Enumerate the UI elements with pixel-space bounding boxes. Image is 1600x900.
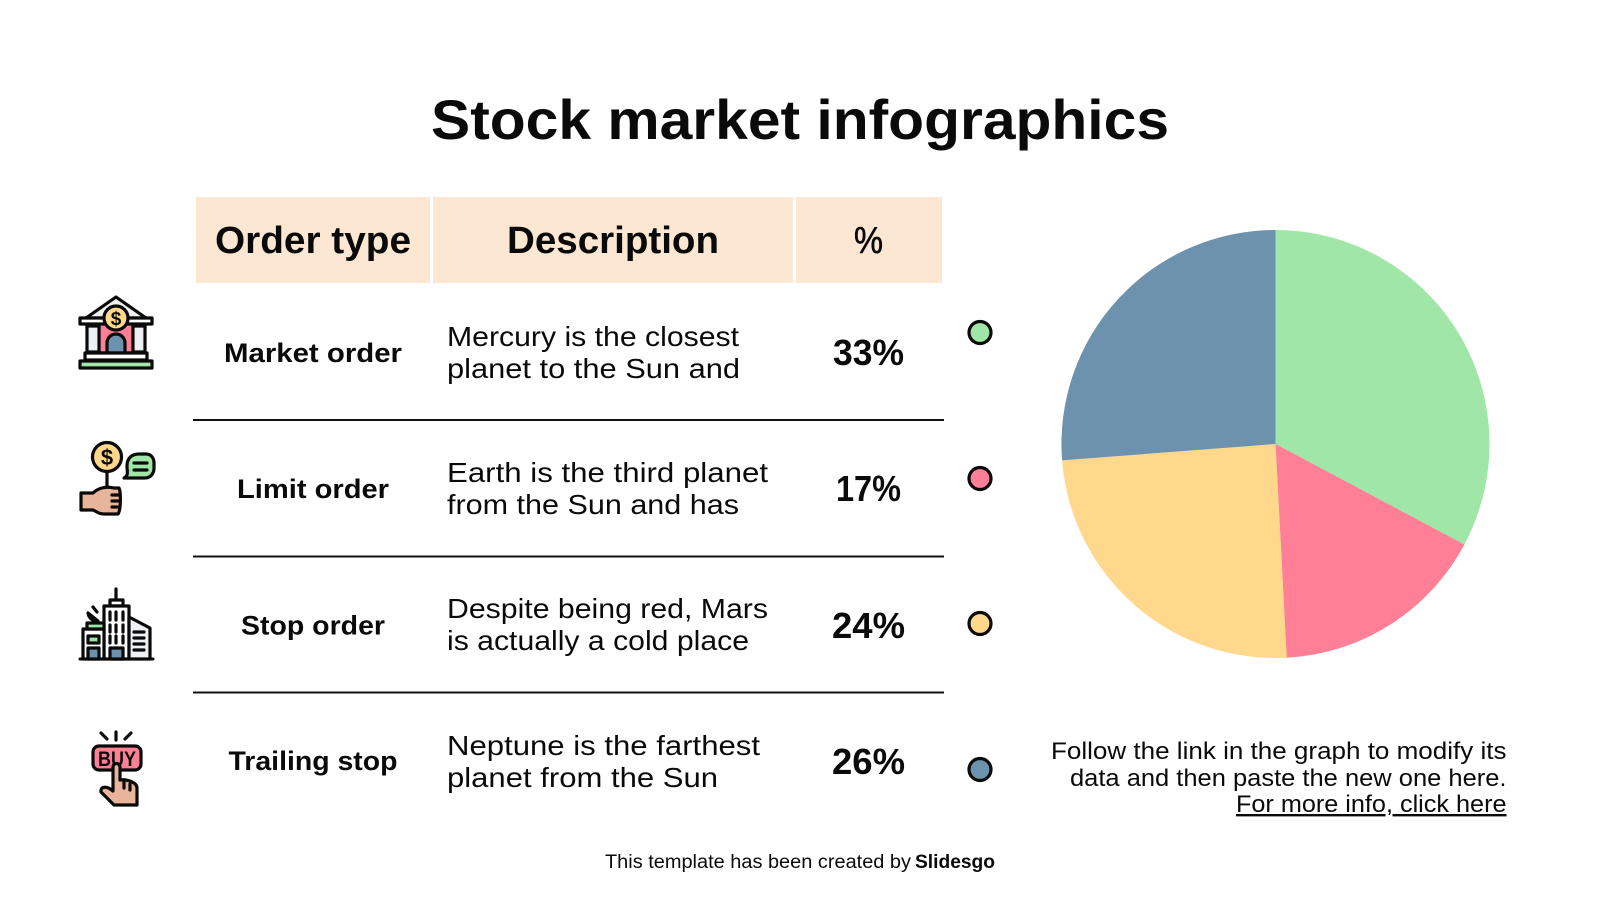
pie chart: [1061, 230, 1489, 658]
row: market order: planet to the Sun and: [447, 353, 740, 384]
row: trailing stop: [228, 730, 905, 793]
row: limit order: [237, 457, 901, 520]
slice: 24%: [1062, 444, 1287, 658]
note text: For more info, click here: [1236, 791, 1506, 818]
icon: hand holding coin: $: [101, 445, 113, 470]
row: market order: 33%: [833, 332, 904, 373]
row: limit order: Earth is the third planet: [447, 457, 768, 488]
icon: bank: [80, 297, 152, 368]
header cell: order type: Order type: [215, 220, 411, 262]
legend: trailing stop: [969, 758, 991, 780]
row: stop order: Stop order: [241, 610, 386, 640]
slice: 33%: [1276, 230, 1489, 544]
footer credit: This template has been created by: [605, 852, 912, 873]
header cell: description: [433, 197, 793, 283]
row: limit order: 17%: [836, 468, 901, 509]
icon: city buildings: [80, 589, 153, 659]
row: stop order: [241, 593, 905, 656]
note text: [1051, 738, 1506, 818]
row: market order: [224, 321, 904, 384]
header cell: percent: %: [854, 220, 883, 261]
table header: [196, 197, 942, 283]
row: trailing stop: Trailing stop: [228, 746, 398, 776]
legend dots: [969, 322, 991, 780]
row: market order: Mercury is the closest: [447, 321, 739, 352]
row: limit order: from the Sun and has: [447, 489, 739, 520]
legend: stop order: [969, 612, 991, 634]
footer credit: Slidesgo: [915, 852, 995, 873]
slice: 26%: [1061, 230, 1276, 460]
note text: data and then paste the new one here.: [1070, 765, 1506, 792]
row: stop order: Despite being red, Mars: [447, 593, 768, 624]
icon: buy button: [93, 732, 141, 805]
row: stop order: 24%: [832, 605, 905, 646]
row: trailing stop: 26%: [832, 741, 905, 782]
row: limit order: Limit order: [237, 474, 390, 504]
legend: market order: [969, 322, 991, 344]
icon: buy button: BUY: [98, 748, 136, 771]
header cell: description: Description: [507, 220, 719, 262]
icon: bank: $: [111, 309, 122, 330]
title: Stock market infographics: [431, 88, 1169, 151]
row: market order: Market order: [224, 338, 403, 368]
note text: Follow the link in the graph to modify its: [1051, 738, 1506, 765]
slice: 17%: [1276, 444, 1464, 658]
header cell: order type: [196, 197, 430, 283]
icon: hand holding coin: [81, 442, 154, 514]
legend: limit order: [969, 468, 991, 490]
row: trailing stop: planet from the Sun: [447, 762, 718, 793]
row: stop order: is actually a cold place: [447, 625, 749, 656]
row: trailing stop: Neptune is the farthest: [447, 730, 760, 761]
header cell: percent: [796, 197, 942, 283]
